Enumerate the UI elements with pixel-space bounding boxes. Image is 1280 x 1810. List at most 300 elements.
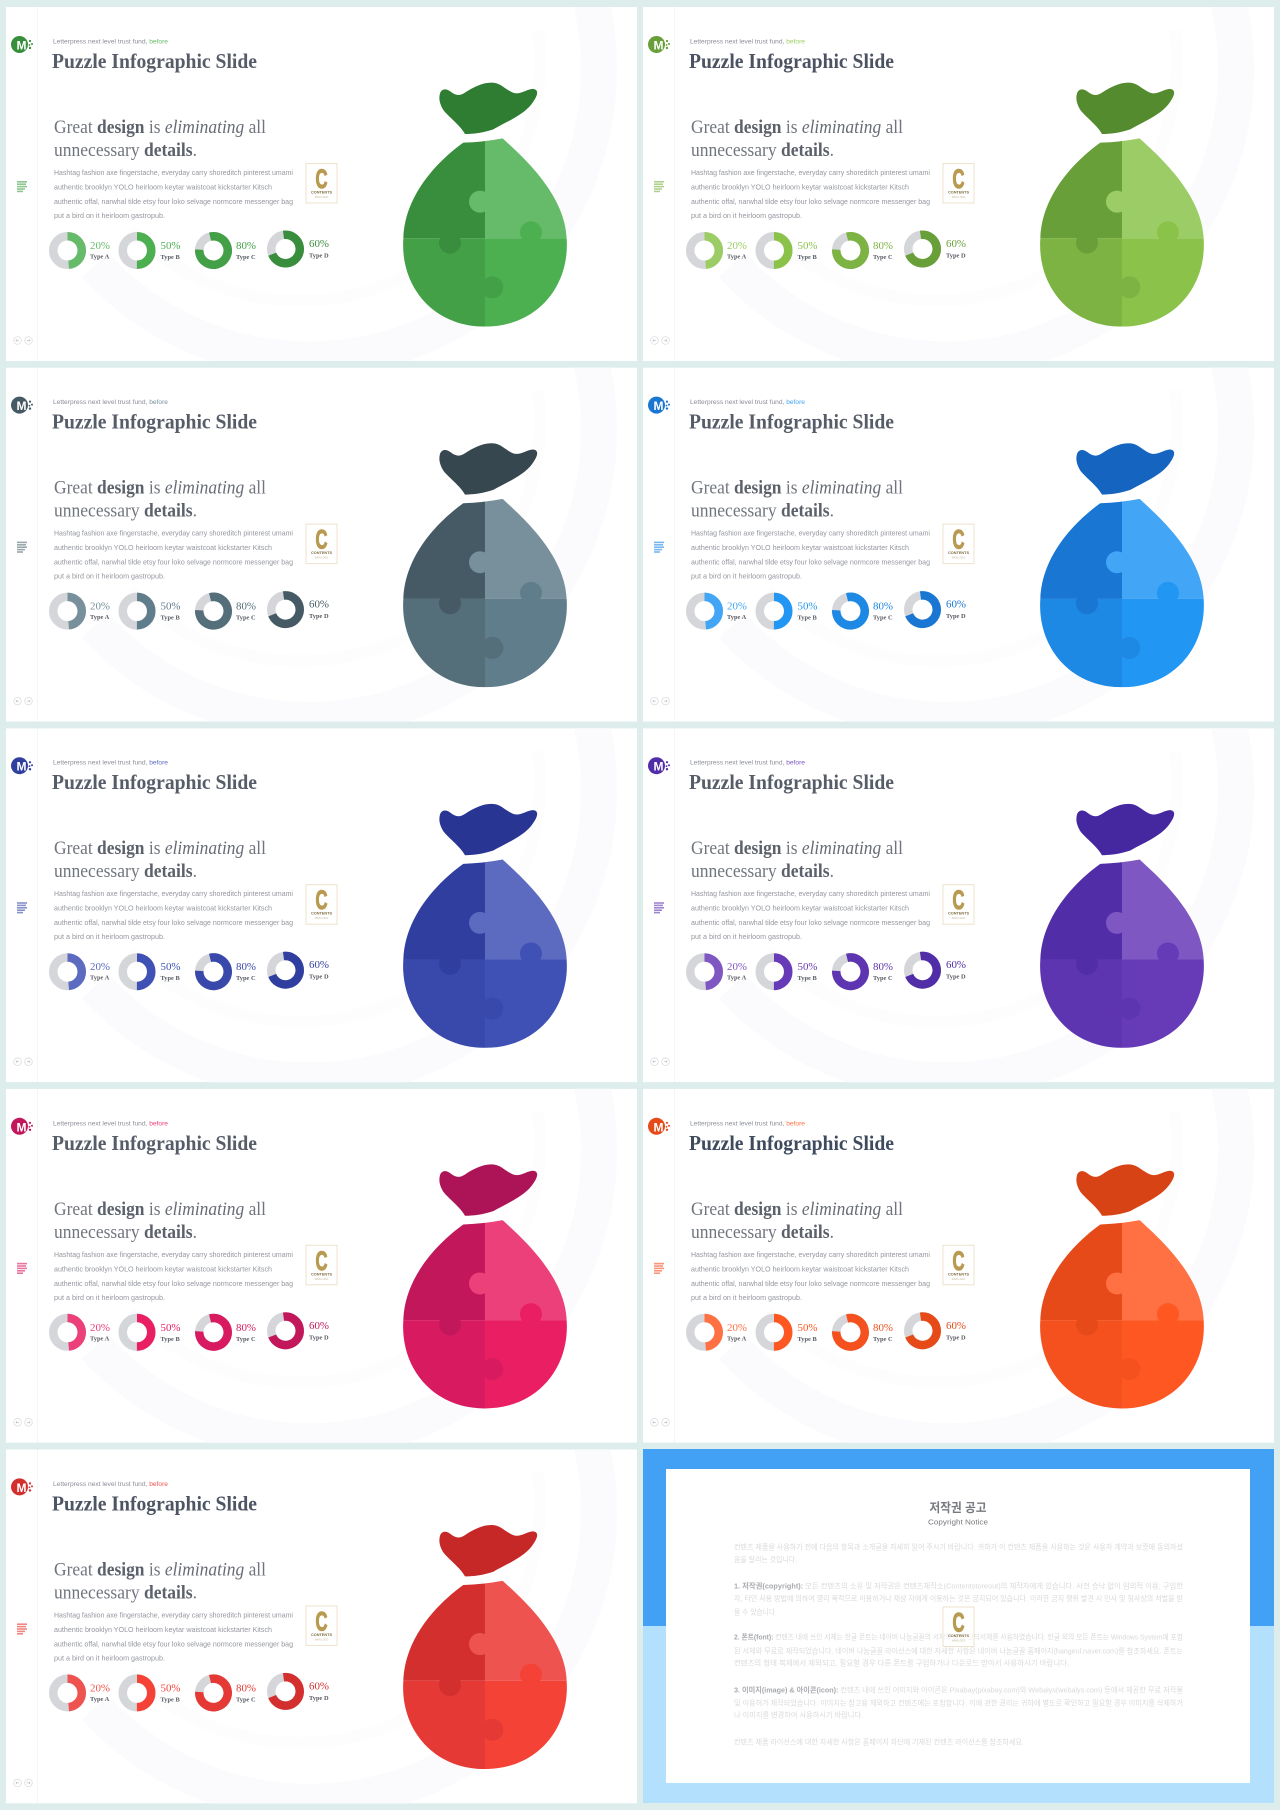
body text: put a bird on it heirloom gastropub. — [54, 1653, 165, 1662]
donut: type A — [690, 957, 747, 986]
title: Puzzle Infographic Slide — [52, 1131, 257, 1155]
lead text: unnecessary details. — [691, 1223, 834, 1243]
donut: type D — [269, 954, 329, 986]
icon: sidebar list — [654, 1263, 664, 1274]
lead text — [691, 839, 903, 882]
icon: sidebar list — [17, 1263, 27, 1274]
donut: type C — [833, 594, 893, 628]
icon: contents card: C — [316, 164, 328, 194]
donut: type C: Type C — [873, 975, 893, 982]
donut: type B — [123, 1679, 181, 1707]
icon: contents card — [943, 1607, 974, 1646]
puzzle money bag — [1030, 1164, 1214, 1413]
body text: put a bird on it heirloom gastropub. — [54, 932, 165, 941]
icon: logo: M — [654, 1120, 664, 1134]
icon: contents card: MAIN LOGO — [952, 1278, 965, 1281]
subtitle: Letterpress next level trust fund, before — [53, 760, 168, 767]
icon: contents card: MAIN LOGO — [952, 1640, 965, 1642]
donut: type D — [906, 233, 966, 265]
donut: type A: Type A — [90, 614, 110, 621]
body text: authentic offal, narwhal tilde etsy four loko selvage normcore messenger bag — [54, 918, 293, 927]
donut: type B: Type B — [798, 254, 817, 261]
icon: logo — [11, 397, 33, 414]
body text — [691, 168, 930, 220]
donut: type A: 20% — [90, 602, 110, 613]
icon: sidebar list — [17, 1623, 27, 1635]
panel: copyright notice — [643, 1449, 1274, 1803]
body text — [54, 1250, 293, 1302]
donut: type D: 60% — [946, 600, 966, 611]
donut: type C — [196, 954, 256, 989]
donut: type C — [196, 1315, 256, 1350]
lead text: Great design is eliminating all — [54, 1200, 266, 1220]
donut: type D: Type D — [309, 974, 329, 981]
notice intro: 음을 알리는 것입니다. — [734, 1555, 797, 1564]
donut: type B — [760, 1318, 818, 1347]
body text — [691, 1250, 930, 1302]
donut: type A: 20% — [90, 1323, 110, 1334]
title: Puzzle Infographic Slide — [689, 410, 894, 434]
donut: type D — [269, 1315, 329, 1347]
donut: type B: Type B — [160, 1696, 180, 1703]
donut: type C: 80% — [873, 962, 893, 973]
subtitle: Letterpress next level trust fund, before — [690, 38, 805, 46]
icon: contents card: CONTENTS — [311, 912, 332, 916]
icon: logo — [11, 1118, 33, 1135]
donut: type D — [906, 954, 966, 986]
donut: type C: 80% — [873, 1323, 893, 1334]
lead text: unnecessary details. — [54, 862, 197, 882]
donut: type B: Type B — [798, 975, 817, 982]
donut: type D: 60% — [309, 600, 329, 611]
body text — [54, 889, 293, 941]
icon: contents card: MAIN LOGO — [952, 196, 965, 199]
body text: Hashtag fashion axe fingerstache, everyday carry shoreditch pinterest umami — [54, 1250, 293, 1259]
body text: Hashtag fashion axe fingerstache, everyday carry shoreditch pinterest umami — [54, 529, 293, 538]
donut: type D: 60% — [946, 239, 966, 250]
donut: type A: Type A — [90, 1335, 110, 1342]
donut: type C: Type C — [236, 975, 256, 982]
donut: type B: 50% — [160, 1683, 181, 1694]
donut: type B: 50% — [160, 1323, 181, 1334]
lead text: unnecessary details. — [691, 862, 834, 882]
icon: navigation arrows — [651, 337, 669, 344]
puzzle money bag — [393, 83, 577, 332]
donut: type A: Type A — [727, 614, 747, 621]
icon: sidebar list — [654, 902, 664, 913]
donut: type B: Type B — [160, 615, 180, 622]
donut: type D: Type D — [309, 252, 329, 260]
donut: type D: Type D — [946, 613, 966, 620]
notice heading: 저작권 공고 — [930, 1500, 986, 1515]
puzzle money bag — [393, 1525, 577, 1774]
icon: contents card — [306, 524, 337, 564]
lead text — [691, 479, 903, 522]
puzzle money bag — [393, 804, 577, 1053]
donut: type A: 20% — [90, 962, 110, 973]
notice: copyright: 자, 타인 사용 방법에 의하여 영리 목적으로 이용하거나 제삼 자에게 이용하는 것은 금지되어 있습니다. 이러한 금지 행위 발견 시 민사 및 형사상의 처벌을 받 — [734, 1594, 1183, 1603]
donut: type B — [760, 236, 818, 265]
donut: type C — [833, 1315, 893, 1350]
donut: type A: Type A — [90, 975, 110, 982]
body text: Hashtag fashion axe fingerstache, everyday carry shoreditch pinterest umami — [691, 529, 930, 538]
panel: blue grey slide — [6, 341, 637, 722]
lead text: Great design is eliminating all — [691, 839, 903, 859]
donut: type A: Type A — [90, 254, 110, 260]
body text — [691, 529, 930, 581]
donut: type C: Type C — [873, 615, 893, 622]
subtitle: Letterpress next level trust fund, before — [690, 1120, 805, 1127]
icon: contents card: CONTENTS — [311, 190, 332, 194]
icon: logo: M — [16, 1120, 26, 1134]
lead text — [54, 1560, 266, 1603]
donut: type D: Type D — [309, 613, 329, 620]
donut: type C — [833, 954, 893, 989]
icon: contents card: C — [952, 1608, 964, 1638]
notice: image and icon: 3. 이미지(image) & 아이콘(icon): 컨텐츠 내에 쓰인 이미지와 아이콘은 Pixabay(pixabay.com)와 Webalys(webalys.com) 등에서 제공한 무료 저작물 — [734, 1686, 1183, 1694]
subtitle: Letterpress next level trust fund, before — [53, 399, 168, 406]
icon: contents card: CONTENTS — [311, 1633, 332, 1637]
donut: type C: Type C — [236, 1696, 256, 1703]
icon: logo — [648, 397, 670, 414]
icon: contents card — [306, 1245, 337, 1285]
title: Puzzle Infographic Slide — [689, 770, 894, 794]
icon: logo: M — [16, 1481, 26, 1495]
donut: type D — [269, 233, 329, 265]
notice: image and icon: 나 이미지를 변경하여 사용하시기 바랍니다. — [734, 1710, 863, 1720]
title: Puzzle Infographic Slide — [52, 410, 257, 434]
donut: type A: 20% — [727, 962, 747, 973]
donut: type C: 80% — [236, 1683, 256, 1694]
icon: logo: M — [16, 399, 26, 413]
donut: type B: Type B — [798, 615, 817, 622]
icon: logo: M — [16, 760, 26, 774]
notice: copyright: 을 수 있습니다. — [734, 1608, 777, 1616]
icon: navigation arrows — [651, 697, 669, 705]
body text: authentic brooklyn YOLO heirloom keytar waistcoat kickstarter Kitsch — [54, 1264, 272, 1273]
notice heading: Copyright Notice — [928, 1518, 988, 1526]
donut: type C: Type C — [236, 615, 256, 622]
donut: type A — [690, 1318, 747, 1347]
donut: type B: Type B — [160, 975, 180, 982]
icon: contents card: MAIN LOGO — [315, 1278, 328, 1281]
icon: contents card — [306, 164, 337, 203]
donut: type D — [906, 1315, 966, 1347]
lead text: Great design is eliminating all — [54, 839, 266, 859]
body text: authentic offal, narwhal tilde etsy four loko selvage normcore messenger bag — [54, 197, 293, 206]
donut: type C: 80% — [236, 241, 256, 252]
body text: Hashtag fashion axe fingerstache, everyday carry shoreditch pinterest umami — [691, 168, 930, 177]
body text: authentic offal, narwhal tilde etsy four loko selvage normcore messenger bag — [54, 1279, 293, 1288]
icon: logo: M — [654, 760, 664, 774]
icon: navigation arrows — [14, 337, 32, 344]
lead text: unnecessary details. — [691, 141, 834, 161]
donut: type C: Type C — [236, 1336, 256, 1343]
body text: authentic brooklyn YOLO heirloom keytar waistcoat kickstarter Kitsch — [691, 182, 909, 192]
icon: contents card: C — [952, 885, 964, 915]
donut: type C — [196, 1676, 256, 1710]
donut: type D: 60% — [309, 1681, 329, 1692]
body text: authentic offal, narwhal tilde etsy four loko selvage normcore messenger bag — [691, 1279, 930, 1288]
icon: contents card: MAIN LOGO — [952, 557, 965, 560]
donut: type D: Type D — [946, 252, 966, 260]
icon: navigation arrows — [14, 1779, 32, 1787]
donut: type C: 80% — [873, 602, 893, 613]
icon: contents card: C — [952, 1246, 964, 1276]
donut: type D — [906, 594, 966, 626]
icon: sidebar list — [17, 902, 27, 913]
notice heading — [928, 1500, 988, 1526]
panel: green slide — [6, 0, 637, 361]
donut: type D: 60% — [946, 1321, 966, 1332]
icon: contents card: MAIN LOGO — [315, 1638, 328, 1641]
donut: type C: Type C — [873, 1336, 893, 1343]
lead text: Great design is eliminating all — [691, 118, 903, 138]
panel: orange slide — [643, 1062, 1274, 1443]
notice: copyright — [734, 1582, 1183, 1616]
lead text: Great design is eliminating all — [691, 479, 903, 499]
donut: type B — [123, 597, 181, 625]
icon: sidebar list — [654, 181, 664, 192]
donut: type B: 50% — [798, 602, 818, 613]
icon: navigation arrows — [14, 697, 32, 705]
icon: contents card: MAIN LOGO — [952, 917, 965, 920]
icon: contents card — [943, 885, 974, 924]
donut: type A: 20% — [727, 1323, 747, 1334]
lead text — [54, 479, 266, 522]
body text: authentic brooklyn YOLO heirloom keytar waistcoat kickstarter Kitsch — [54, 1625, 272, 1634]
icon: contents card: MAIN LOGO — [315, 196, 328, 199]
body text: authentic brooklyn YOLO heirloom keytar waistcoat kickstarter Kitsch — [54, 543, 272, 552]
lead text — [54, 839, 266, 882]
body text: put a bird on it heirloom gastropub. — [691, 211, 802, 220]
icon: contents card: CONTENTS — [948, 190, 969, 194]
donut: type B: Type B — [798, 1336, 817, 1343]
icon: contents card: CONTENTS — [948, 1272, 969, 1276]
icon: logo: M — [654, 38, 664, 52]
donut: type D: Type D — [946, 974, 966, 981]
body text: authentic brooklyn YOLO heirloom keytar waistcoat kickstarter Kitsch — [54, 182, 272, 192]
donut: type B: 50% — [798, 962, 818, 973]
body text: put a bird on it heirloom gastropub. — [54, 1293, 165, 1302]
body text: put a bird on it heirloom gastropub. — [691, 932, 802, 941]
icon: contents card: C — [316, 525, 328, 555]
notice: image and icon: 및 이용허가 제작되었습니다. 이미지는 참고용 제외하고 컨텐츠에는 포함합니다. 이에 관한 권리는 귀하에 별도로 확인하고 필요할 경우 이미지를 삭제하거 — [734, 1698, 1183, 1708]
donut: type B: 50% — [798, 241, 818, 252]
icon: contents card: MAIN LOGO — [315, 557, 328, 560]
body text: authentic brooklyn YOLO heirloom keytar waistcoat kickstarter Kitsch — [691, 904, 909, 913]
title: Puzzle Infographic Slide — [52, 1491, 257, 1515]
subtitle: Letterpress next level trust fund, before — [53, 1120, 168, 1127]
lead text — [691, 1200, 903, 1243]
lead text: Great design is eliminating all — [54, 1560, 266, 1580]
lead text: unnecessary details. — [54, 141, 197, 161]
icon: contents card: C — [952, 164, 964, 194]
icon: logo — [11, 757, 33, 774]
donut: type B — [123, 1318, 181, 1347]
panel: light green slide — [643, 0, 1274, 361]
donut: type D: 60% — [309, 1321, 329, 1332]
donut: type A — [53, 1318, 110, 1347]
title: Puzzle Infographic Slide — [689, 1131, 894, 1155]
lead text: Great design is eliminating all — [54, 118, 266, 138]
donut: type B: 50% — [160, 602, 181, 613]
donut: type A: Type A — [727, 1335, 747, 1342]
donut: type B: 50% — [160, 962, 181, 973]
subtitle: Letterpress next level trust fund, before — [53, 1481, 168, 1488]
donut: type C — [196, 233, 256, 268]
donut: type D: Type D — [946, 1334, 966, 1341]
icon: contents card: CONTENTS — [948, 912, 969, 916]
body text: put a bird on it heirloom gastropub. — [691, 572, 802, 581]
body text: Hashtag fashion axe fingerstache, everyday carry shoreditch pinterest umami — [54, 889, 293, 898]
donut: type A: 20% — [90, 241, 110, 252]
subtitle: Letterpress next level trust fund, before — [690, 399, 805, 406]
donut: type D — [269, 1675, 329, 1707]
body text: authentic offal, narwhal tilde etsy four loko selvage normcore messenger bag — [691, 558, 930, 567]
icon: logo — [648, 36, 670, 53]
icon: contents card: CONTENTS — [948, 1634, 969, 1638]
icon: logo — [648, 757, 670, 774]
icon: logo — [648, 1118, 670, 1135]
donut: type C: 80% — [873, 241, 893, 252]
lead text — [54, 1200, 266, 1243]
icon: contents card: C — [952, 525, 964, 555]
icon: contents card: CONTENTS — [311, 551, 332, 555]
icon: navigation arrows — [651, 1058, 669, 1066]
panel: blue slide — [643, 341, 1274, 722]
notice intro: 컨텐츠 제품을 사용하기 전에 다음의 항목과 소개글을 자세히 읽어 주시기 바랍니다. 귀하가 이 컨텐츠 제품을 사용하는 것은 사용자 계약과 보증에 동의하셨 — [734, 1542, 1183, 1552]
icon: logo: M — [16, 38, 26, 52]
icon: contents card: MAIN LOGO — [315, 917, 328, 920]
donut: type B: Type B — [160, 1336, 180, 1343]
icon: navigation arrows — [14, 1418, 32, 1426]
icon: logo — [11, 1478, 33, 1495]
notice: font: 된 서체와 무료로 제작되었습니다. 네이버 나눔글꼴 라이선스에 대한 자세한 사항은 네이버 나눔글꼴 홈페이지(hangeul.naver.com)를 참조하세요. 폰트는 — [734, 1646, 1183, 1656]
icon: contents card: CONTENTS — [948, 551, 969, 555]
donut: type A — [53, 1679, 110, 1707]
donut: type C — [196, 594, 256, 628]
body text: put a bird on it heirloom gastropub. — [54, 211, 165, 220]
notice: image and icon — [734, 1686, 1183, 1720]
subtitle: Letterpress next level trust fund, before — [53, 38, 168, 46]
donut: type B — [123, 957, 181, 986]
icon: logo — [11, 36, 33, 53]
donut: type A — [53, 236, 110, 265]
icon: contents card — [306, 885, 337, 924]
donut: type B — [760, 597, 818, 625]
donut: type A: Type A — [727, 254, 747, 260]
lead text — [691, 118, 903, 161]
donut: type C — [833, 233, 893, 268]
notice: font: 컨텐츠의 형태 복제에서 제외되고, 필요할 경우 다른 폰트를 구입하거나 다운로드 받아서 사용하시기 바랍니다. — [734, 1658, 1069, 1668]
icon: sidebar list — [17, 542, 27, 553]
donut: type B — [123, 236, 181, 265]
lead text — [54, 118, 266, 161]
donut: type A: 20% — [90, 1683, 110, 1694]
puzzle money bag — [393, 1164, 577, 1413]
lead text: unnecessary details. — [54, 1583, 197, 1603]
title: Puzzle Infographic Slide — [52, 49, 257, 73]
icon: contents card — [943, 164, 974, 203]
icon: logo: M — [654, 399, 664, 413]
title: Puzzle Infographic Slide — [689, 49, 894, 73]
panel: indigo slide — [6, 701, 637, 1082]
body text: authentic offal, narwhal tilde etsy four loko selvage normcore messenger bag — [691, 197, 930, 206]
icon: contents card: C — [316, 885, 328, 915]
donut: type D: 60% — [946, 960, 966, 971]
donut: type D: 60% — [309, 239, 329, 250]
puzzle money bag — [1030, 804, 1214, 1053]
title: Puzzle Infographic Slide — [52, 770, 257, 794]
donut: type A: Type A — [90, 1696, 110, 1703]
lead text: Great design is eliminating all — [691, 1200, 903, 1220]
body text: Hashtag fashion axe fingerstache, everyday carry shoreditch pinterest umami — [691, 1250, 930, 1259]
body text: authentic offal, narwhal tilde etsy four loko selvage normcore messenger bag — [54, 558, 293, 567]
lead text: unnecessary details. — [54, 1223, 197, 1243]
icon: navigation arrows — [14, 1058, 32, 1066]
donut: type C: 80% — [236, 1323, 256, 1334]
panel: purple slide — [643, 701, 1274, 1082]
lead text: unnecessary details. — [54, 502, 197, 522]
donut: type A: 20% — [727, 241, 747, 252]
body text — [691, 889, 930, 941]
lead text: unnecessary details. — [691, 502, 834, 522]
donut: type A — [53, 957, 110, 986]
donut: type D: Type D — [309, 1334, 329, 1341]
body text: authentic brooklyn YOLO heirloom keytar waistcoat kickstarter Kitsch — [691, 1264, 909, 1273]
icon: contents card: C — [316, 1246, 328, 1276]
body text: authentic offal, narwhal tilde etsy four loko selvage normcore messenger bag — [54, 1639, 293, 1648]
body text: Hashtag fashion axe fingerstache, everyday carry shoreditch pinterest umami — [691, 889, 930, 898]
notice: font: 2. 폰트(font): 컨텐츠 내에 쓰인 서체는 한글 폰트는 네이버 나눔글꼴의 서체와 맑은 고딕서체를 사용하였습니다. 한글 외의 모든 폰트는 Windows System에 포함 — [734, 1632, 1183, 1642]
donut: type C: Type C — [236, 254, 256, 261]
body text: Hashtag fashion axe fingerstache, everyday carry shoreditch pinterest umami — [54, 168, 293, 177]
body text — [54, 168, 293, 220]
donut: type D — [269, 594, 329, 626]
body text: Hashtag fashion axe fingerstache, everyday carry shoreditch pinterest umami — [54, 1610, 293, 1619]
body text: authentic offal, narwhal tilde etsy four loko selvage normcore messenger bag — [691, 918, 930, 927]
notice closing line: 컨텐츠 제품 라이선스에 대한 자세한 사항은 홈페이지 하단에 기재된 컨텐츠 라이선스를 참조하세요. — [734, 1738, 1024, 1746]
donut: type A: Type A — [727, 975, 747, 982]
icon: contents card: C — [316, 1606, 328, 1636]
notice: copyright: 1. 저작권(copyright): 모든 컨텐츠의 소유 및 저작권은 컨텐츠제작소(Contentstoreout)의 제작자에게 있습니다. 사전 승낙 없이 임의적 이용, 구입한 — [734, 1582, 1183, 1590]
icon: sidebar list — [17, 181, 27, 192]
icon: sidebar list — [654, 542, 664, 553]
donut: type C: Type C — [873, 254, 893, 261]
puzzle money bag — [1030, 83, 1214, 332]
puzzle money bag — [1030, 443, 1214, 692]
donut: type A — [690, 597, 747, 625]
donut: type A — [53, 597, 110, 625]
notice intro — [734, 1542, 1183, 1564]
donut: type A — [690, 236, 747, 265]
donut: type B: 50% — [160, 241, 181, 252]
icon: contents card — [943, 524, 974, 564]
icon: contents card: CONTENTS — [311, 1272, 332, 1276]
donut: type B: 50% — [798, 1323, 818, 1334]
body text: authentic brooklyn YOLO heirloom keytar waistcoat kickstarter Kitsch — [54, 904, 272, 913]
body text: put a bird on it heirloom gastropub. — [691, 1293, 802, 1302]
body text: put a bird on it heirloom gastropub. — [54, 572, 165, 581]
donut: type A: 20% — [727, 602, 747, 613]
donut: type B — [760, 957, 818, 986]
donut: type D: Type D — [309, 1695, 329, 1702]
icon: contents card — [306, 1606, 337, 1645]
donut: type B: Type B — [160, 254, 180, 261]
lead text: Great design is eliminating all — [54, 479, 266, 499]
body text — [54, 529, 293, 581]
